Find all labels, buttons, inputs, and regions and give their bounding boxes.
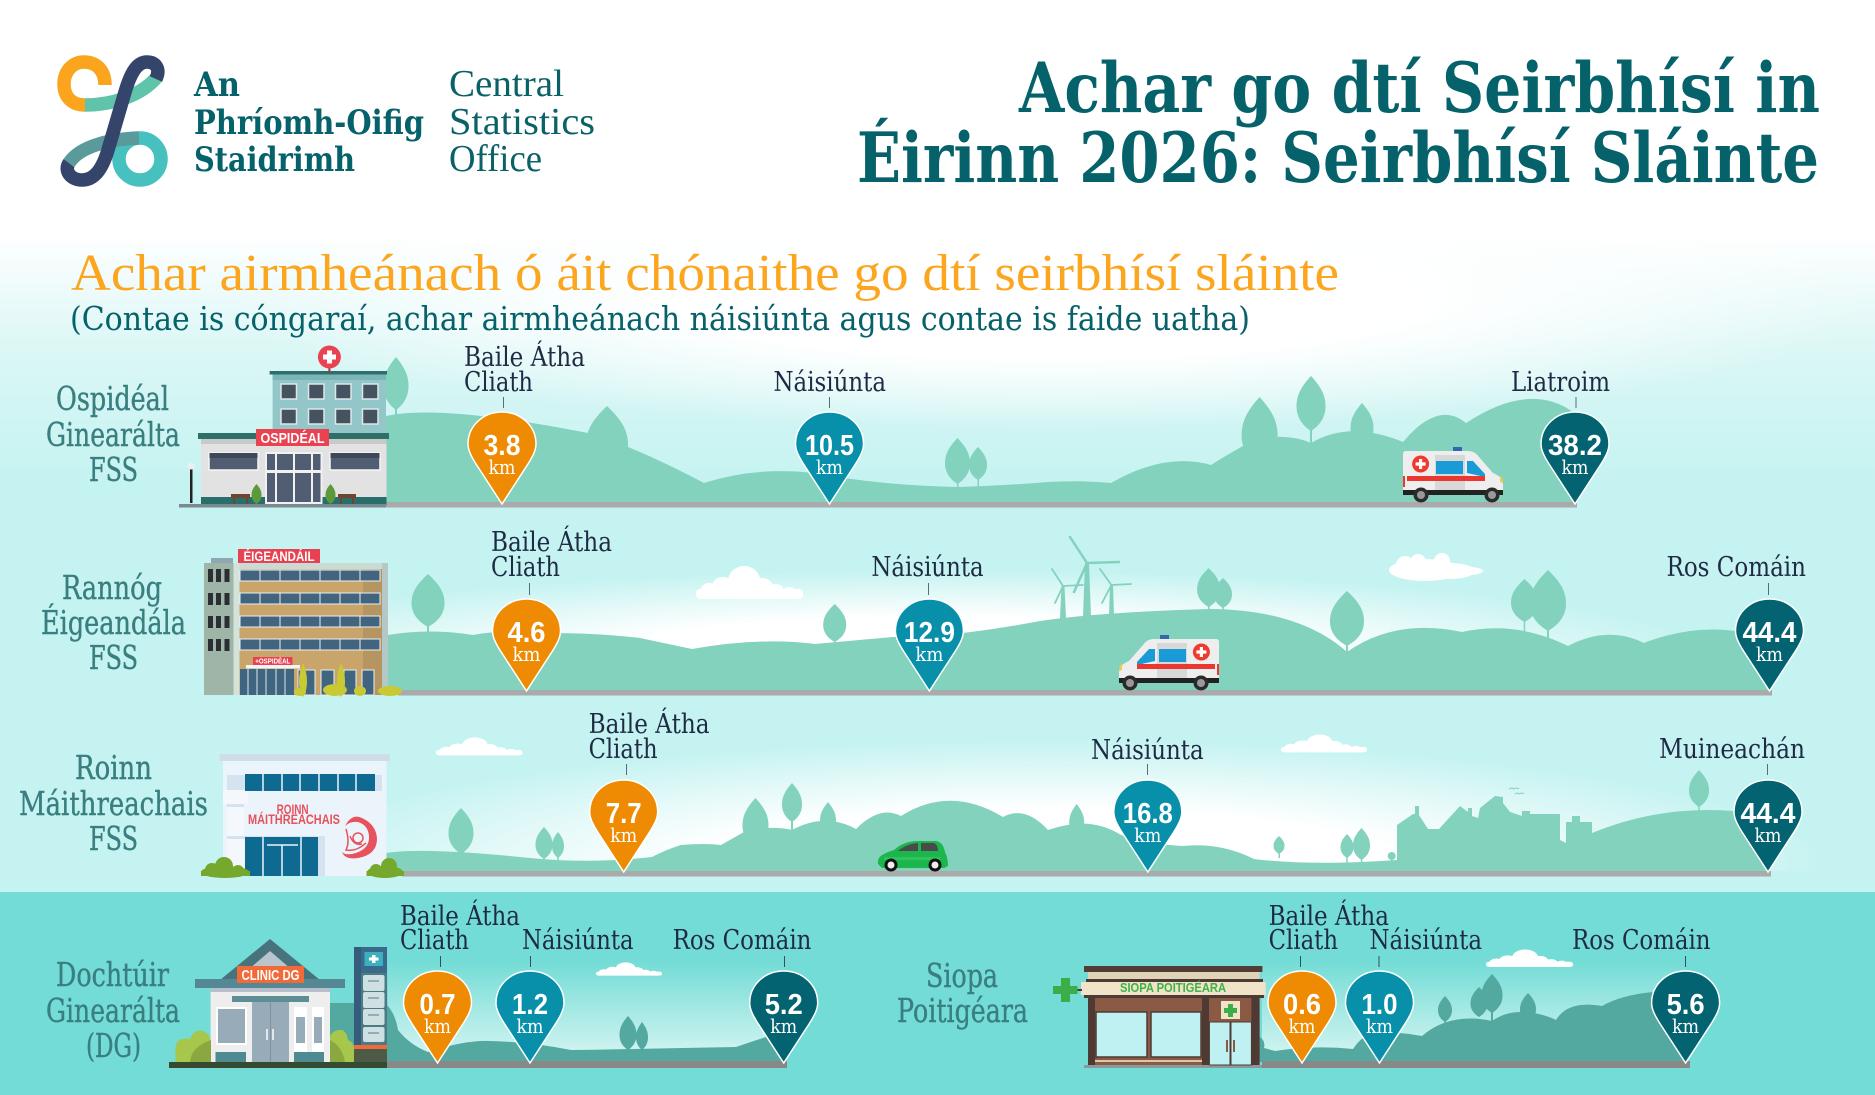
sub-subheading: (Contae is cóngaraí, achar airmheánach náisiúnta agus contae is faide uatha) [70, 299, 1250, 338]
pin: Dublin 4.6 km: Baile Átha [491, 525, 612, 558]
illustration: hospital [179, 346, 389, 508]
panel: emergency department row [41, 525, 1806, 697]
sign: ÉIGEANDÁIL: ÉIGEANDÁIL [244, 549, 314, 564]
icon: green cross [1053, 978, 1078, 1002]
cloud [1389, 553, 1483, 581]
icon: ambulance [1119, 635, 1219, 690]
road [402, 871, 1771, 876]
pin: Dublin 0.6 km: 0.6 [1283, 989, 1321, 1021]
sign text: ROINN [277, 801, 309, 817]
pin: Roscommon 5.2 km: Ros Comáin [673, 925, 811, 956]
illustration: GP clinic [169, 939, 387, 1068]
row label [46, 379, 180, 489]
road [387, 1061, 787, 1068]
pin: national 12.9 km: 12.9 [904, 617, 955, 649]
logo text: Irish: Staidrimh [194, 140, 355, 180]
logo text: English: Office [449, 138, 542, 180]
landscape [384, 357, 1576, 503]
pin: national 10.5 km: Náisiúnta [774, 367, 886, 398]
row label [897, 956, 1028, 1030]
pin: national 16.8 km: 16.8 [1123, 798, 1173, 830]
pin: Dublin 0.6 km [1268, 899, 1389, 1063]
pin: Dublin 7.7 km: Baile Átha [589, 707, 710, 740]
row label: FSS [89, 638, 138, 677]
pin: Roscommon 5.6 km: 5.6 [1667, 989, 1705, 1021]
pin: Roscommon 44.4 km: 44.4 [1742, 617, 1796, 649]
title [857, 48, 1820, 199]
pin: national 10.5 km: 10.5 [805, 430, 854, 462]
pin: national 1.2 km: 1.2 [512, 989, 548, 1021]
pin: Dublin 7.7 km: km [610, 823, 637, 847]
row label: Ginearálta [46, 991, 180, 1030]
panel: general hospital row [46, 340, 1610, 508]
sign text: MÁITHREACHAIS [248, 811, 340, 827]
pin: Monaghan 44.4 km [1659, 734, 1805, 872]
pin: national 1.0 km [1346, 925, 1482, 1063]
row label: Ginearálta [46, 415, 180, 454]
row label: Poitigéara [897, 991, 1028, 1030]
sign: +OSPIDÉAL: +OSPIDÉAL [255, 656, 291, 666]
panel: GP row [46, 899, 818, 1068]
landscape [388, 568, 1770, 691]
pin: national 1.2 km [496, 925, 634, 1063]
row label [41, 568, 186, 677]
pin: Dublin 0.6 km: km [1288, 1014, 1316, 1038]
pin: national 16.8 km: Náisiúnta [1091, 735, 1204, 766]
pin: Roscommon 44.4 km [1666, 552, 1806, 691]
pin: Dublin 0.7 km: km [424, 1014, 451, 1038]
pin: national 12.9 km: km [915, 642, 943, 666]
pin: Leitrim 38.2 km: 38.2 [1548, 430, 1602, 462]
icon: mother and child [342, 817, 377, 858]
pin: Dublin 4.6 km: km [512, 642, 541, 666]
pin: Roscommon 5.2 km: 5.2 [765, 989, 803, 1021]
logo mark [64, 62, 161, 180]
pin: Roscommon 5.6 km [1572, 925, 1720, 1063]
pin: Dublin 3.8 km: 3.8 [484, 430, 520, 462]
icon: birds [1509, 788, 1524, 794]
pin: Roscommon 5.6 km: km [1672, 1014, 1699, 1038]
pin: Dublin 4.6 km: Cliath [491, 552, 560, 583]
icon: wind turbines [1052, 537, 1131, 619]
pin: national 12.9 km [871, 552, 984, 691]
pin: national 1.2 km: km [516, 1014, 544, 1038]
pin: Dublin 0.7 km: 0.7 [420, 989, 456, 1021]
row label [46, 955, 180, 1065]
pin: national 10.5 km [774, 367, 886, 504]
subheading: Achar airmheánach ó áit chónaithe go dtí seirbhísí sláinte [71, 245, 1339, 302]
sign: OSPIDÉAL: OSPIDÉAL [260, 430, 324, 447]
cloud [436, 738, 522, 755]
sign text: SIOPA POITIGÉARA [1120, 980, 1227, 995]
pin: Leitrim 38.2 km [1511, 367, 1610, 504]
pin: Dublin 4.6 km [491, 525, 612, 691]
logo text: English: Central [449, 63, 564, 105]
landscape [330, 1003, 785, 1062]
row label [19, 748, 208, 858]
pin: national 1.0 km: Náisiúnta [1370, 925, 1482, 956]
icon: ambulance [1403, 447, 1503, 502]
row label: Máithreachais [19, 784, 208, 823]
pin: Dublin 3.8 km [464, 340, 585, 504]
panel: maternity row [19, 707, 1805, 878]
pin: Dublin 0.6 km: Cliath [1269, 925, 1338, 956]
pin: Dublin 3.8 km: Baile Átha [464, 340, 585, 373]
panel: pharmacy row [897, 899, 1720, 1068]
pin: national 1.0 km: km [1366, 1014, 1393, 1038]
sign: +OSPIDÉAL [253, 656, 292, 666]
pin: national 16.8 km: km [1134, 823, 1161, 847]
icon: green car [878, 841, 948, 872]
sign: CLINIC DG: CLINIC DG [242, 967, 300, 984]
pin: Leitrim 38.2 km: Liatroim [1511, 367, 1610, 398]
cloud [1486, 950, 1573, 967]
landscape [1258, 974, 1686, 1062]
row label: Rannóg [62, 568, 162, 607]
pin: Roscommon 5.6 km: Ros Comáin [1572, 925, 1710, 956]
background [0, 261, 1875, 1095]
pin: Dublin 0.7 km [400, 899, 520, 1063]
row label: Dochtúir [56, 955, 169, 994]
pin: national 12.9 km: Náisiúnta [871, 552, 984, 583]
pin: Dublin 3.8 km: Cliath [464, 367, 533, 398]
row label: Ospidéal [56, 379, 169, 418]
pin: Roscommon 44.4 km: Ros Comáin [1666, 552, 1806, 583]
pin: Dublin 4.6 km: 4.6 [508, 617, 546, 649]
pin: national 10.5 km: km [816, 455, 843, 479]
pin: Roscommon 44.4 km: km [1756, 642, 1783, 666]
pin: national 16.8 km [1091, 735, 1204, 872]
row label: FSS [89, 450, 138, 489]
illustration: maternity building [201, 754, 404, 878]
pin: Roscommon 5.2 km [673, 925, 818, 1063]
pin: Dublin 3.8 km: km [488, 455, 516, 479]
cloud [1281, 735, 1367, 752]
sign text [248, 801, 340, 827]
pin: Dublin 7.7 km: 7.7 [606, 798, 642, 830]
cloud [696, 566, 803, 599]
pin: national 1.0 km: 1.0 [1362, 989, 1398, 1021]
logo text: English [449, 63, 595, 180]
row label: (DG) [86, 1026, 141, 1065]
pin: Dublin 0.7 km: Baile Átha [400, 899, 520, 932]
row label: Éigeandála [41, 602, 186, 642]
pin: Dublin 7.7 km: Cliath [589, 734, 658, 765]
illustration: pharmacy [1053, 966, 1266, 1068]
road [398, 690, 1772, 696]
row label: FSS [89, 819, 138, 858]
row label: Roinn [75, 748, 152, 787]
pin: Dublin 0.6 km: Baile Átha [1269, 899, 1389, 932]
pin: Monaghan 44.4 km: 44.4 [1740, 798, 1796, 830]
pin: national 1.2 km: Náisiúnta [522, 925, 634, 956]
logo text: Irish [193, 65, 424, 180]
illustration: emergency building [204, 549, 402, 697]
pin: Roscommon 5.2 km: km [770, 1014, 797, 1038]
logo text: English: Statistics [449, 101, 595, 143]
pin: Leitrim 38.2 km: km [1562, 455, 1589, 479]
road [386, 502, 1577, 508]
pin: Monaghan 44.4 km: km [1754, 823, 1782, 847]
pin: Monaghan 44.4 km: Muineachán [1659, 734, 1805, 765]
logo text: Irish: An [193, 65, 240, 105]
row label: Siopa [926, 956, 998, 995]
logo text: Irish: Phríomh-Oifig [194, 103, 424, 143]
cloud [596, 962, 662, 976]
pin: Dublin 7.7 km [589, 707, 710, 872]
landscape [386, 770, 1768, 871]
pin: Dublin 0.7 km: Cliath [400, 925, 469, 956]
road [1262, 1061, 1690, 1068]
